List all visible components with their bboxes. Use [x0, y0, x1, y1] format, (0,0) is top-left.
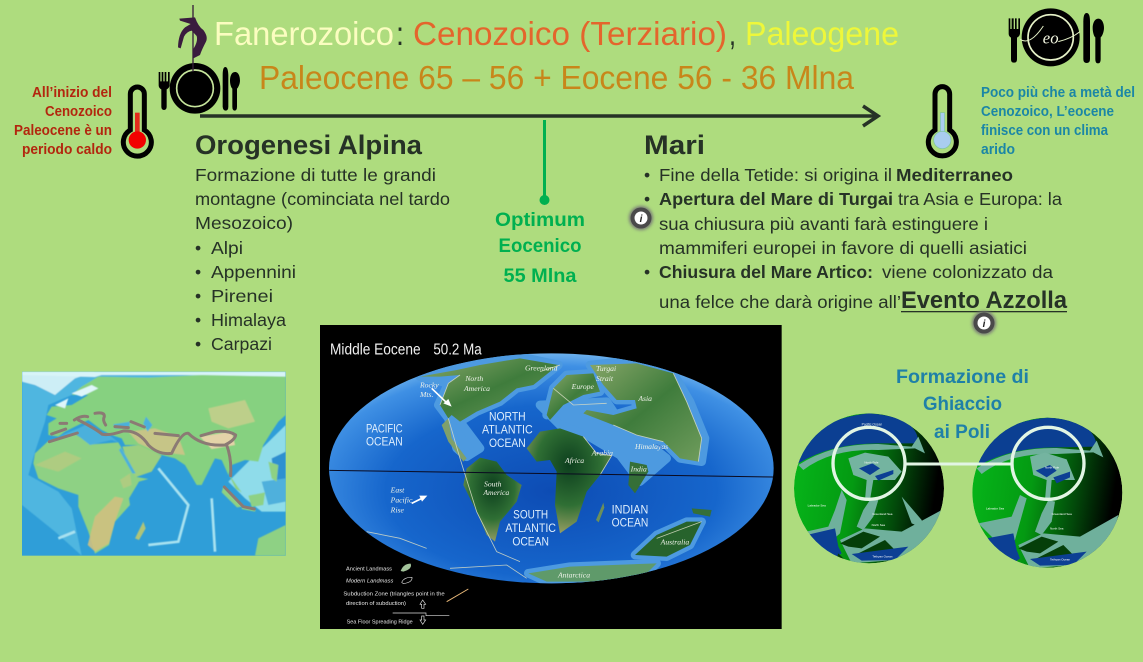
- text block: mari: Apertura del Mare di Turgai: [659, 189, 893, 209]
- text block: mari: [644, 165, 1068, 314]
- ocean labels: OCEAN: [366, 435, 403, 449]
- logo text: eo: [1043, 28, 1059, 47]
- marker: Optimum Eocenico: Optimum: [495, 210, 585, 231]
- icon: plate: [170, 63, 220, 114]
- heading: Mari: Mari: [644, 130, 705, 160]
- legend: direction of subduction): [346, 601, 406, 607]
- highlight circle 2: [1012, 427, 1084, 499]
- region labels: Antarctica: [557, 571, 590, 580]
- region labels: North: [464, 374, 483, 383]
- ocean labels: ATLANTIC: [482, 423, 533, 437]
- callout: hot start: [14, 85, 112, 158]
- icon: info button 2: i: [983, 319, 986, 330]
- text block: mari: •: [644, 262, 650, 282]
- land: India: [628, 462, 648, 493]
- globe 1: Pacific Ocean: [862, 422, 882, 426]
- land: Europe: [547, 373, 600, 420]
- title: Fanerozoico: [214, 15, 394, 52]
- land: South America: [463, 458, 522, 542]
- heading: Formazione di Ghiaccio ai Poli: Ghiaccio: [923, 394, 1002, 415]
- arrows on map: [412, 388, 452, 503]
- map: Middle Eocene world: 50.2 Ma: [433, 341, 482, 358]
- legend: Subduction Zone (triangles point in the: [343, 592, 445, 598]
- text block: mari: tra Asia e Europa: la: [898, 189, 1062, 209]
- coast lines: [367, 365, 702, 578]
- land: New Guinea: [692, 508, 712, 517]
- region labels: Pacific: [390, 495, 413, 504]
- heading: Formazione di Ghiaccio ai Poli: ai Poli: [934, 422, 990, 443]
- region labels: America: [482, 488, 509, 497]
- ocean labels: INDIAN: [612, 502, 648, 516]
- text block: orogenesi: Appennini: [211, 262, 296, 282]
- callout: arid end: arido: [981, 142, 1015, 158]
- shallow seas: [420, 357, 705, 582]
- icon: spoon: [1093, 19, 1104, 63]
- title: [214, 15, 899, 52]
- globe 1: Tethyan Ocean: [872, 554, 893, 558]
- marker: Optimum Eocenico: 55 Mlna: [504, 266, 577, 287]
- icon: info button 2: [972, 311, 996, 335]
- region labels: Greenland: [525, 363, 558, 372]
- icon: plate: [1022, 8, 1080, 66]
- callout: arid end: finisce con un clima: [981, 123, 1109, 139]
- map: Alpine orogeny belt: [22, 372, 286, 556]
- arrow: timeline: [200, 106, 878, 126]
- icon: eo plate with cutlery: [1009, 8, 1104, 66]
- title: :: [396, 15, 404, 52]
- icon: dancer: [178, 17, 207, 58]
- ocean labels: NORTH: [489, 410, 526, 424]
- text block: orogenesi: Carpazi: [211, 334, 272, 354]
- text block: orogenesi: Alpi: [211, 238, 243, 258]
- globe 2: North Sea: [1050, 526, 1064, 530]
- heading: Formazione di Ghiaccio ai Poli: Formazione di: [896, 367, 1029, 388]
- icon: fork: [159, 72, 170, 110]
- text block: orogenesi: •: [195, 286, 201, 306]
- legend: Sea Floor Spreading Ridge: [347, 620, 413, 626]
- title: Cenozoico (Terziario): [413, 15, 727, 52]
- ocean labels: OCEAN: [612, 516, 648, 530]
- region labels: South: [484, 479, 502, 488]
- legend: Modern Landmass: [346, 578, 393, 584]
- region labels: Asia: [637, 394, 652, 403]
- marker: Optimum Eocenico: [495, 120, 585, 287]
- region labels: Australia: [660, 537, 689, 546]
- text block: orogenesi: •: [195, 238, 201, 258]
- ocean labels: PACIFIC: [366, 421, 403, 435]
- ocean labels: OCEAN: [489, 436, 526, 450]
- text block: mari: Mediterraneo: [896, 165, 1013, 185]
- text block: mari: Evento Azzolla: [901, 287, 1068, 314]
- text block: mari: sua chiusura più avanti farà estinguere i: [659, 214, 988, 234]
- region labels: Arabia: [591, 449, 613, 458]
- icon: pole: [192, 5, 194, 72]
- globe 2: Tethyan Ocean: [1050, 558, 1070, 562]
- globe 1: North Pole: [864, 461, 879, 465]
- ocean labels: SOUTH: [513, 508, 548, 522]
- region labels: Strait: [596, 374, 614, 383]
- icon: info button 1: i: [640, 214, 643, 225]
- globe 1: Labrador Sea: [808, 504, 826, 508]
- text block: orogenesi: Pirenei: [211, 286, 273, 306]
- land: Madagascar: [135, 522, 146, 540]
- map: Middle Eocene world: [320, 325, 782, 629]
- icon: spoon: [230, 72, 240, 111]
- land: North America: [420, 358, 558, 422]
- globe 2: [970, 418, 1122, 568]
- callout: arid end: Poco più che a metà del: [981, 85, 1135, 101]
- callout: arid end: Cenozoico, L’eocene: [981, 104, 1114, 120]
- callout: hot start: periodo caldo: [22, 142, 112, 158]
- text block: orogenesi: •: [195, 334, 201, 354]
- text block: orogenesi: •: [195, 310, 201, 330]
- icon: thermometer cold: [928, 87, 956, 156]
- land: Antarctica: [528, 563, 657, 582]
- land: seas: [58, 417, 152, 473]
- icon: fork: [1009, 18, 1020, 63]
- globe 1: [792, 413, 944, 563]
- text block: mari: Fine della Tetide: si origina il: [659, 165, 892, 185]
- shelf highlights: [22, 374, 192, 555]
- icon: knife: [223, 67, 228, 111]
- land: Africa: [527, 428, 612, 533]
- globe 2: Labrador Sea: [986, 506, 1004, 510]
- text block: orogenesi: Formazione di tutte le grandi: [195, 165, 436, 185]
- heading: Formazione di Ghiaccio ai Poli: [896, 367, 1029, 443]
- region labels: India: [630, 465, 647, 474]
- region labels: America: [463, 384, 490, 393]
- land: Southeast Asia: [222, 462, 286, 556]
- globe 2: North Pole: [1045, 465, 1059, 469]
- connector: [906, 459, 1012, 468]
- region labels: Europe: [571, 382, 595, 391]
- globes: polar ice formation: [792, 413, 1122, 568]
- region labels: Himalayas: [634, 442, 668, 451]
- globe 1: Greenland Sea: [872, 512, 893, 516]
- region labels: Africa: [564, 456, 584, 465]
- text block: mari: mammiferi europei in favore di quelli asiatici: [659, 238, 1027, 258]
- region labels: Turgai: [596, 364, 616, 373]
- orogeny belt: [49, 413, 254, 509]
- icon: thermometer hot: [123, 87, 151, 156]
- callout: arid end: [981, 85, 1135, 158]
- land: Madagascar: [596, 503, 604, 522]
- region labels: Rocky: [419, 381, 439, 390]
- icon: knife: [1083, 13, 1090, 63]
- legend: [343, 564, 468, 626]
- ocean labels: [366, 410, 648, 548]
- callout: hot start: Paleocene è un: [14, 123, 112, 139]
- map title: Middle Eocene: [330, 341, 421, 358]
- callout: hot start: All’inizio del: [32, 85, 112, 101]
- text block: orogenesi: [195, 165, 450, 354]
- land: Australia: [635, 522, 702, 557]
- region labels: [390, 363, 689, 580]
- title: Paleogene: [745, 15, 899, 52]
- legend: Ancient Landmass: [346, 566, 392, 572]
- text block: mari: viene colonizzato da: [882, 262, 1053, 282]
- equator: [329, 470, 773, 477]
- land: Asia: [583, 363, 702, 462]
- ocean labels: ATLANTIC: [505, 521, 556, 535]
- subtitle: Paleocene 65 – 56 + Eocene 56 - 36 Mlna: [259, 59, 855, 96]
- globe 2: Greenland Sea: [1052, 512, 1072, 516]
- region labels: East: [390, 485, 405, 494]
- text block: mari: •: [644, 189, 650, 209]
- region labels: Rise: [390, 505, 404, 514]
- region labels: Mts.: [419, 390, 433, 399]
- globe 1: North Sea: [872, 523, 885, 527]
- land: Eurasia: [47, 375, 286, 485]
- land: Arabia: [122, 445, 162, 477]
- text block: orogenesi: montagne (cominciata nel tardo: [195, 189, 450, 209]
- text block: orogenesi: Himalaya: [211, 310, 286, 330]
- ocean labels: OCEAN: [512, 534, 549, 548]
- title: ,: [729, 15, 736, 52]
- text block: mari: una felce che darà origine all’: [659, 292, 901, 312]
- text block: orogenesi: Mesozoico): [195, 213, 293, 233]
- land: desert tones: [88, 497, 123, 552]
- land: Central America: [442, 418, 467, 462]
- text block: mari: •: [644, 165, 650, 185]
- heading: Orogenesi Alpina: Orogenesi Alpina: [195, 130, 423, 160]
- marker: Optimum Eocenico: Eocenico: [498, 236, 582, 257]
- highlight circle 1: [833, 427, 905, 499]
- icon: info button 1: [629, 206, 653, 230]
- icon: pole dancer on plate with cutlery: [159, 5, 240, 114]
- text block: orogenesi: •: [195, 262, 201, 282]
- ocean: [329, 353, 774, 583]
- text block: mari: Chiusura del Mare Artico:: [659, 262, 873, 282]
- callout: hot start: Cenozoico: [45, 104, 112, 120]
- land: Africa: [33, 434, 148, 554]
